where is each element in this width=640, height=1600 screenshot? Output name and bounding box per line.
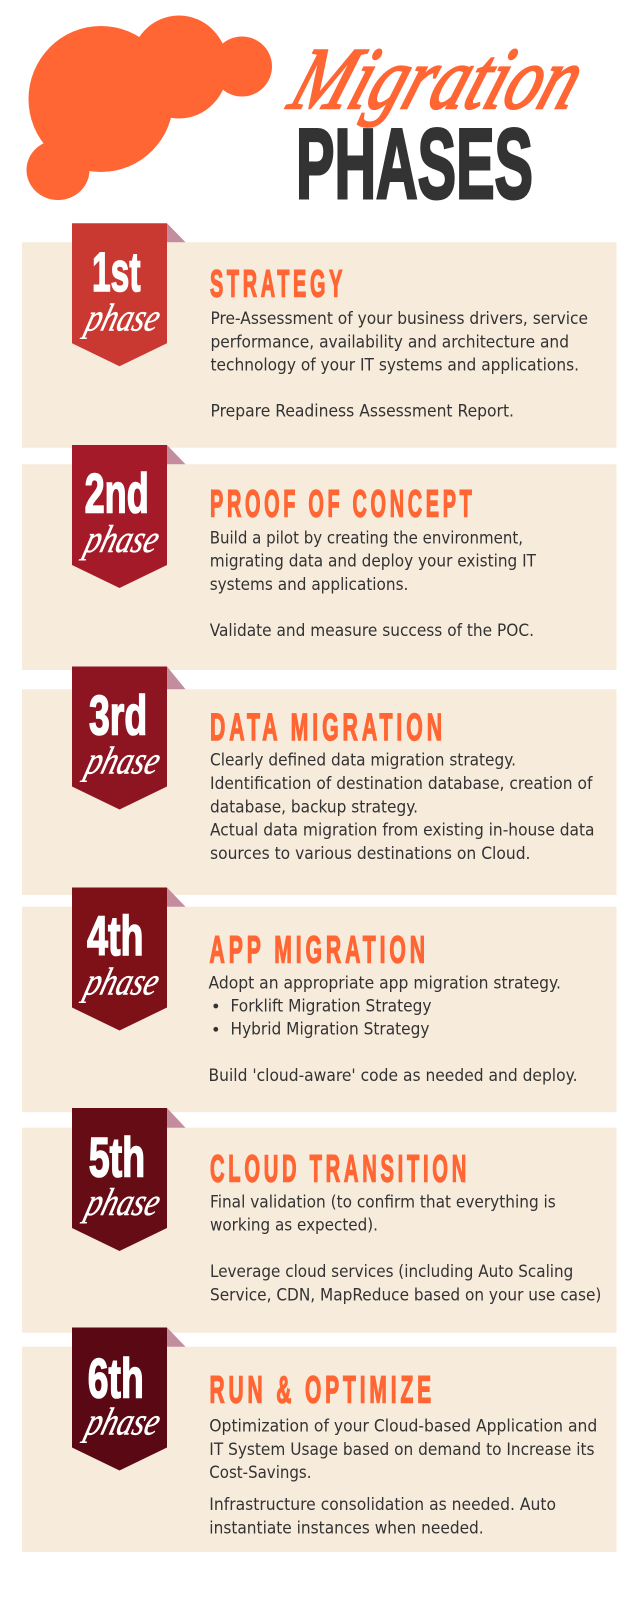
ribbon: 1st phase: 1st — [92, 240, 140, 303]
panel: 6th phase run and optimize — [22, 1328, 616, 1552]
body text: run and optimize: Optimization of your Cloud-based Application and — [209, 1416, 597, 1436]
body text: run and optimize: instantiate instances when needed. — [209, 1517, 484, 1537]
ribbon: 3rd phase — [72, 666, 186, 810]
ribbon: 6th phase: phase — [79, 1400, 166, 1443]
heading: run and optimize: RUN & OPTIMIZE — [210, 1369, 435, 1411]
panel: 3rd phase data migration — [22, 666, 616, 895]
body text: cloud transition: Final validation (to confirm that everything is — [210, 1191, 556, 1211]
body text: run and optimize — [209, 1416, 597, 1537]
ribbon: 5th phase: phase — [79, 1181, 166, 1224]
ribbon: 5th phase — [72, 1108, 186, 1251]
ribbon: 3rd phase: 3rd — [89, 684, 147, 747]
ribbon: 4th phase — [72, 888, 186, 1030]
ribbon: 6th phase — [72, 1328, 186, 1470]
body text: app migration: Hybrid Migration Strategy — [230, 1019, 430, 1039]
body text: cloud transition: Leverage cloud services (including Auto Scaling — [210, 1261, 573, 1281]
body text: app migration: Build 'cloud-aware' code as needed and deploy. — [208, 1065, 578, 1085]
body text: strategy: Pre-Assessment of your business drivers, service — [210, 308, 588, 328]
body text: data migration — [210, 750, 594, 863]
heading: data migration: DATA MIGRATION — [210, 707, 446, 749]
ribbon: 1st phase: phase — [79, 296, 166, 339]
ribbon: 3rd phase: phase — [79, 739, 166, 782]
ribbon: 2nd phase: 2nd — [85, 461, 149, 524]
ribbon: 6th phase: 6th — [88, 1347, 144, 1410]
body text: strategy: Prepare Readiness Assessment Report. — [210, 401, 514, 421]
body text: strategy: performance, availability and architecture and — [210, 331, 569, 351]
body text: strategy — [210, 308, 588, 421]
body text: strategy: technology of your IT systems and applications. — [210, 355, 579, 375]
body text: proof of concept: migrating data and deploy your existing IT — [210, 551, 537, 571]
body text: run and optimize: IT System Usage based on demand to Increase its — [209, 1439, 595, 1459]
ribbon: 1st phase — [72, 223, 186, 366]
body text: run and optimize: Cost-Savings. — [209, 1462, 312, 1482]
body text: run and optimize: Infrastructure consolidation as needed. Auto — [209, 1494, 556, 1514]
body text: proof of concept: Build a pilot by creating the environment, — [210, 527, 523, 547]
body text: proof of concept: systems and applications. — [210, 574, 408, 594]
body text: cloud transition: working as expected). — [210, 1215, 378, 1235]
body text: data migration: Identification of destination database, creation of — [210, 773, 593, 793]
ribbon: 4th phase: 4th — [87, 904, 144, 967]
body text: data migration: sources to various destinations on Cloud. — [210, 843, 530, 863]
body text: cloud transition — [210, 1191, 601, 1304]
ribbon: 2nd phase: phase — [78, 518, 165, 561]
body text: data migration: Clearly defined data migration strategy. — [210, 750, 516, 770]
heading: app migration: APP MIGRATION — [210, 929, 429, 971]
panel: 5th phase cloud transition — [22, 1108, 616, 1333]
body text: data migration: Actual data migration from existing in-house data — [210, 820, 594, 840]
body text: proof of concept — [210, 527, 537, 640]
body text: app migration: Adopt an appropriate app migration strategy. — [208, 972, 561, 992]
body text: app migration: Forklift Migration Strategy — [230, 995, 432, 1015]
ribbon: 4th phase: phase — [78, 960, 165, 1003]
ribbon: 5th phase: 5th — [89, 1126, 145, 1189]
body text: data migration: database, backup strategy. — [210, 796, 418, 816]
panel: 2nd phase proof of concept — [22, 445, 616, 670]
body text: app migration — [208, 972, 578, 1085]
ribbon: 2nd phase — [72, 445, 186, 588]
header — [26, 16, 598, 219]
panel: 4th phase app migration — [22, 888, 616, 1112]
body text: proof of concept: Validate and measure success of the POC. — [210, 620, 534, 640]
icon: orange blob — [26, 16, 272, 200]
panel: 1st phase strategy — [22, 223, 616, 448]
heading: strategy: STRATEGY — [210, 264, 346, 306]
body text: cloud transition: Service, CDN, MapReduce based on your use case) — [210, 1284, 601, 1304]
